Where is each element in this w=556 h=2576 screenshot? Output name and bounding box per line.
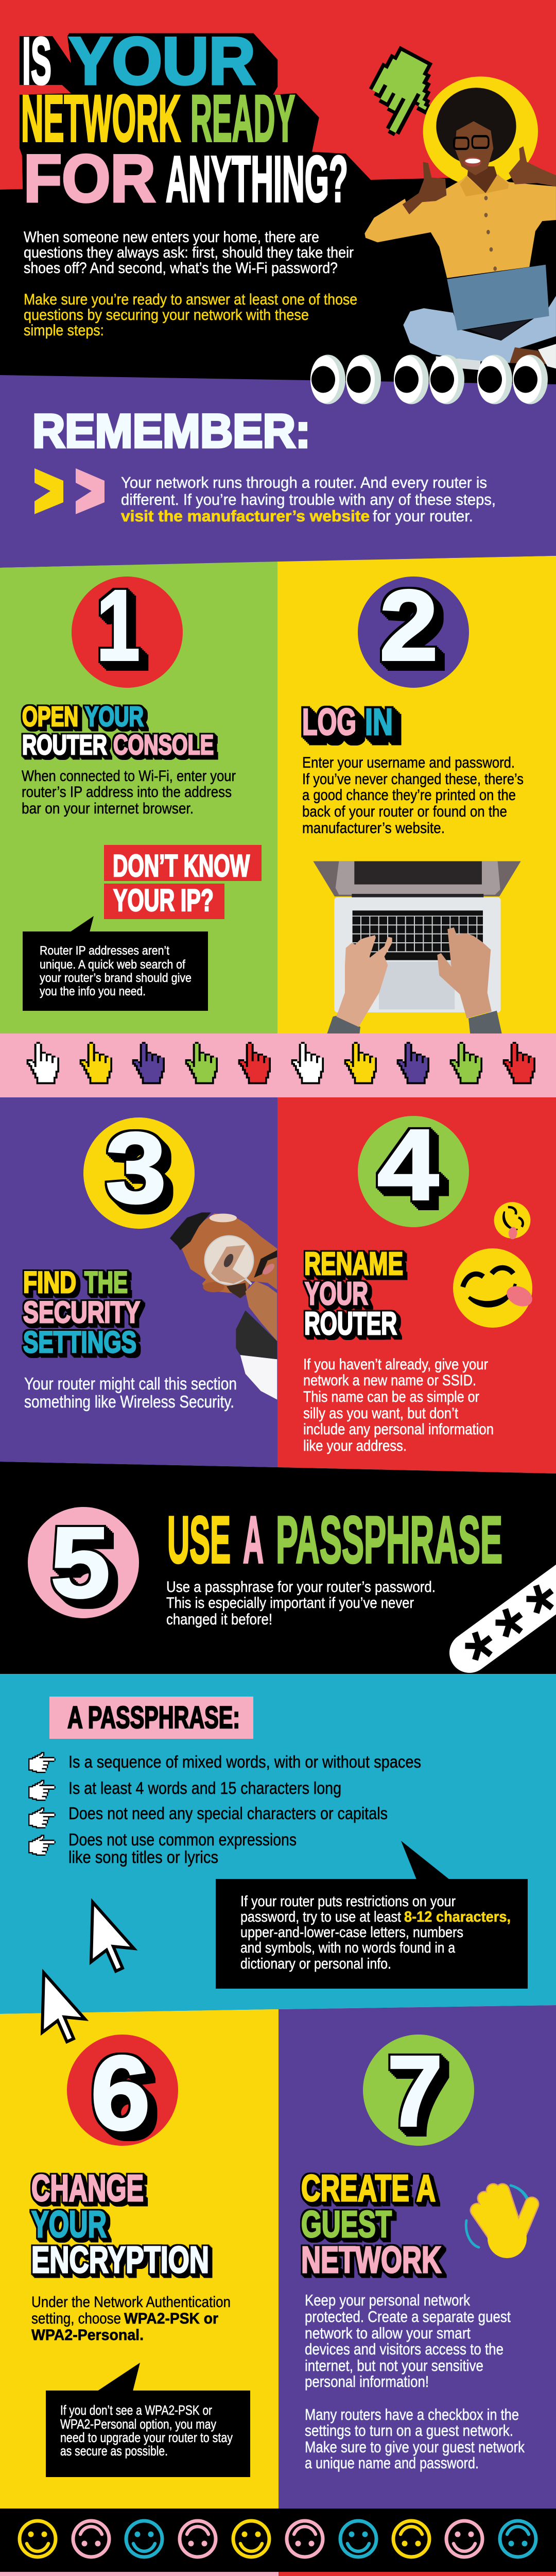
panel: step 3	[0, 1097, 277, 1467]
passphrase checklist: Is at least 4 words and 15 characters long	[68, 1778, 341, 1798]
step 3 text: Your router might call this section	[24, 1374, 237, 1393]
icon: password asterisk pill	[462, 1563, 556, 1662]
step 4 text: This name can be as simple or	[303, 1388, 479, 1405]
step 6 text: setting, choose	[31, 2310, 121, 2327]
icon: small tongue emoji	[489, 1197, 536, 1245]
number badge 2: 2	[379, 569, 438, 682]
step 3 text: something like Wireless Security.	[24, 1392, 234, 1411]
intro call to action: questions by securing your network with these	[24, 307, 309, 324]
callout: router ip addresses: you the info you need.	[40, 985, 146, 998]
step 6 text: WPA2-PSK or	[124, 2310, 218, 2327]
heading: find the security settings	[23, 1266, 140, 1359]
title: YOUR	[69, 23, 255, 98]
step 7 text: a unique name and password.	[305, 2454, 479, 2472]
photo: man with magnifying glass	[170, 1212, 277, 1400]
title: READY	[190, 82, 295, 156]
step 1 text	[22, 768, 236, 817]
callout heading: don't know your ip	[104, 845, 262, 919]
heading: find the security settings: FIND	[23, 1266, 76, 1299]
icon: large tongue emoji	[453, 1248, 535, 1328]
panel: step 9	[279, 2572, 556, 2576]
callout: password restrictions: 8-12 characters,	[404, 1909, 511, 1925]
step 7 text: personal information!	[305, 2372, 429, 2391]
step 2 text: a good chance they’re printed on the	[302, 787, 516, 804]
callout: router ip addresses: unique. A quick web search of	[40, 958, 185, 972]
heading: change your encryption	[31, 2168, 209, 2281]
panel: hero header	[0, 0, 556, 392]
heading: create a guest network: GUEST	[301, 2204, 392, 2245]
heading: use a passphrase	[167, 1503, 502, 1577]
step 7 text: devices and visitors access to the	[305, 2340, 503, 2358]
cursor hand strip	[0, 1033, 556, 1097]
callout heading: don't know your ip: DON’T KNOW	[113, 849, 250, 883]
step 4 text: network a new name or SSID.	[303, 1372, 476, 1389]
heading: log in: IN	[365, 702, 393, 743]
passphrase checklist: Is a sequence of mixed words, with or without spaces	[68, 1752, 421, 1771]
step 5 text: This is especially important if you’ve never	[166, 1595, 414, 1612]
heading: use a passphrase: A	[243, 1503, 264, 1577]
callout: upgrade your router: need to upgrade your router to stay	[60, 2430, 233, 2445]
heading: change your encryption: YOUR	[31, 2204, 107, 2245]
callout heading: don't know your ip: YOUR IP?	[113, 883, 214, 918]
step 4 text: silly as you want, but don’t	[303, 1405, 459, 1422]
heading: use a passphrase: USE	[167, 1503, 231, 1577]
heading: log in: LOG	[302, 702, 356, 743]
number badge 4: 4	[377, 1109, 439, 1221]
number badge 3: 3	[106, 1112, 166, 1224]
heading: rename your router: RENAME	[304, 1246, 403, 1282]
heading: open your router console: YOUR	[85, 701, 144, 732]
number badge 6: 6	[91, 2034, 150, 2152]
title: NETWORK	[21, 82, 181, 156]
step 4 text: like your address.	[303, 1437, 407, 1454]
heading: rename your router: ROUTER	[304, 1306, 397, 1342]
panel: step 7	[279, 2005, 556, 2509]
title	[21, 23, 348, 216]
step 4 text: include any personal information	[303, 1421, 494, 1438]
heading: open your router console: CONSOLE	[113, 730, 214, 760]
heading: open your router console	[22, 701, 214, 760]
intro call to action: Make sure you’re ready to answer at least one of those	[24, 291, 357, 308]
heading: create a guest network: NETWORK	[301, 2240, 441, 2281]
heading: find the security settings: SETTINGS	[23, 1326, 136, 1359]
step 1 text: bar on your internet browser.	[22, 800, 194, 817]
step 2 text	[302, 754, 524, 837]
panel: step 5	[0, 1462, 556, 1674]
number badge 5: 5	[50, 1506, 110, 1619]
heading: find the security settings: SECURITY	[23, 1296, 140, 1329]
number badge 7: 7	[387, 2035, 443, 2147]
remember text: different. If you’re having trouble with any of these steps,	[121, 490, 496, 509]
icon: waving hand	[466, 2185, 532, 2258]
remember text	[121, 473, 496, 525]
panel: passphrase definition	[0, 1674, 556, 2014]
heading: a passphrase: A PASSPHRASE:	[67, 1700, 240, 1735]
callout: password restrictions: and symbols, with no words found in a	[240, 1940, 456, 1956]
heading: rename your router	[304, 1246, 403, 1342]
panel: hero header: ANYTHING?	[166, 143, 348, 215]
callout: upgrade your router: If you don’t see a WPA2-PSK or	[60, 2402, 212, 2418]
step 5 text: changed it before!	[166, 1611, 272, 1628]
heading: rename your router: YOUR	[305, 1276, 368, 1312]
title: FOR	[24, 141, 155, 216]
step 5 text	[166, 1579, 436, 1628]
callout: upgrade your router	[46, 2363, 250, 2477]
smiley strip	[0, 2509, 556, 2572]
panel: step 6	[0, 2009, 279, 2509]
icon: green pointing hand	[355, 42, 449, 145]
number badge 5	[28, 1506, 139, 1619]
passphrase checklist: like song titles or lyrics	[68, 1848, 218, 1867]
step 6 text	[31, 2294, 231, 2344]
icon: double chevrons	[34, 468, 105, 514]
heading: create a guest network: CREATE	[301, 2168, 409, 2209]
callout: upgrade your router: as secure as possible.	[60, 2443, 168, 2459]
step 6 text: WPA2-Personal.	[31, 2327, 144, 2344]
step 7 text: internet, but not your sensitive	[305, 2357, 483, 2375]
heading: a passphrase	[49, 1697, 253, 1739]
step 2 text: manufacturer’s website.	[302, 820, 445, 837]
photo: woman with laptop giving thumbs up	[364, 77, 556, 370]
number badge 3	[83, 1112, 195, 1229]
intro text: shoes off? And second, what’s the Wi-Fi password?	[24, 260, 338, 277]
panel: step 8	[0, 2572, 279, 2576]
title black silhouette	[20, 33, 371, 202]
heading: find the security settings: THE	[84, 1266, 128, 1299]
panel: step 4	[277, 1097, 556, 1473]
step 3 text	[24, 1374, 237, 1411]
callout: password restrictions: password, try to use at least	[240, 1909, 401, 1925]
callout: password restrictions	[216, 1841, 528, 1989]
callout: router ip addresses	[23, 916, 208, 1011]
step 4 text: If you haven’t already, give your	[303, 1356, 488, 1373]
icon: arrow cursors	[91, 1902, 134, 1971]
remember text: visit the manufacturer’s website	[121, 507, 370, 525]
step 7 text	[305, 2291, 525, 2472]
remember text: Your network runs through a router. And every router is	[121, 473, 487, 492]
panel: step 1	[0, 562, 277, 1036]
step 7 text: settings to turn on a guest network.	[305, 2421, 513, 2439]
step 2 text: back of your router or found on the	[302, 803, 507, 820]
heading: create a guest network: A	[416, 2168, 436, 2209]
intro call to action	[24, 291, 357, 339]
intro text: When someone new enters your home, there are	[24, 229, 319, 246]
number badge 1	[72, 569, 183, 688]
panel: remember	[0, 354, 556, 568]
callout: router ip addresses: your router’s brand should give	[40, 971, 192, 985]
heading: change your encryption: CHANGE	[31, 2168, 144, 2209]
intro text	[24, 229, 354, 277]
heading: remember: REMEMBER:	[32, 405, 310, 457]
icon: lower arrow cursor	[42, 1973, 85, 2042]
number badge 4	[358, 1109, 469, 1227]
callout: router ip addresses: Router IP addresses aren’t	[40, 944, 169, 958]
number badge 1: 1	[96, 569, 140, 682]
photo: hands typing on laptop	[313, 861, 521, 1034]
heading: open your router console: ROUTER	[22, 730, 107, 760]
step 2 text: Enter your username and password.	[302, 754, 515, 771]
icon: googly eyes	[310, 354, 548, 404]
passphrase checklist	[28, 1752, 421, 1867]
intro text: questions they always ask: first, should they take their	[24, 244, 354, 261]
callout: password restrictions: If your router puts restrictions on your	[240, 1893, 456, 1910]
panel: step 2	[277, 556, 556, 1036]
step 7 text: protected. Create a separate guest	[305, 2308, 511, 2326]
number badge 6	[67, 2034, 178, 2152]
step 1 text: router’s IP address into the address	[22, 784, 232, 801]
title: IS	[22, 23, 51, 98]
step 7 text: network to allow your smart	[305, 2324, 471, 2342]
step 1 text: When connected to Wi-Fi, enter your	[22, 768, 236, 785]
step 2 text: If you’ve never changed these, there’s	[302, 771, 524, 788]
step 4 text	[303, 1356, 494, 1454]
bullet icon hands	[28, 1752, 56, 1856]
heading: create a guest network	[301, 2168, 441, 2281]
passphrase checklist: Does not need any special characters or capitals	[68, 1804, 388, 1823]
remember text: for your router.	[373, 507, 473, 525]
step 6 text: Under the Network Authentication	[31, 2294, 231, 2311]
heading: change your encryption: ENCRYPTION	[31, 2240, 209, 2281]
heading: open your router console: OPEN	[22, 701, 78, 732]
step 5 text: Use a passphrase for your router’s password.	[166, 1579, 436, 1596]
callout: upgrade your router: WPA2-Personal option, you may	[60, 2416, 216, 2432]
number badge 7	[363, 2035, 474, 2147]
step 7 text: Keep your personal network	[305, 2291, 470, 2309]
number badge 2	[358, 569, 469, 688]
intro call to action: simple steps:	[24, 322, 104, 339]
callout: password restrictions: upper-and-lower-case letters, numbers	[240, 1924, 463, 1941]
passphrase checklist: Does not use common expressions	[68, 1830, 297, 1849]
callout: password restrictions: dictionary or personal info.	[240, 1956, 391, 1972]
